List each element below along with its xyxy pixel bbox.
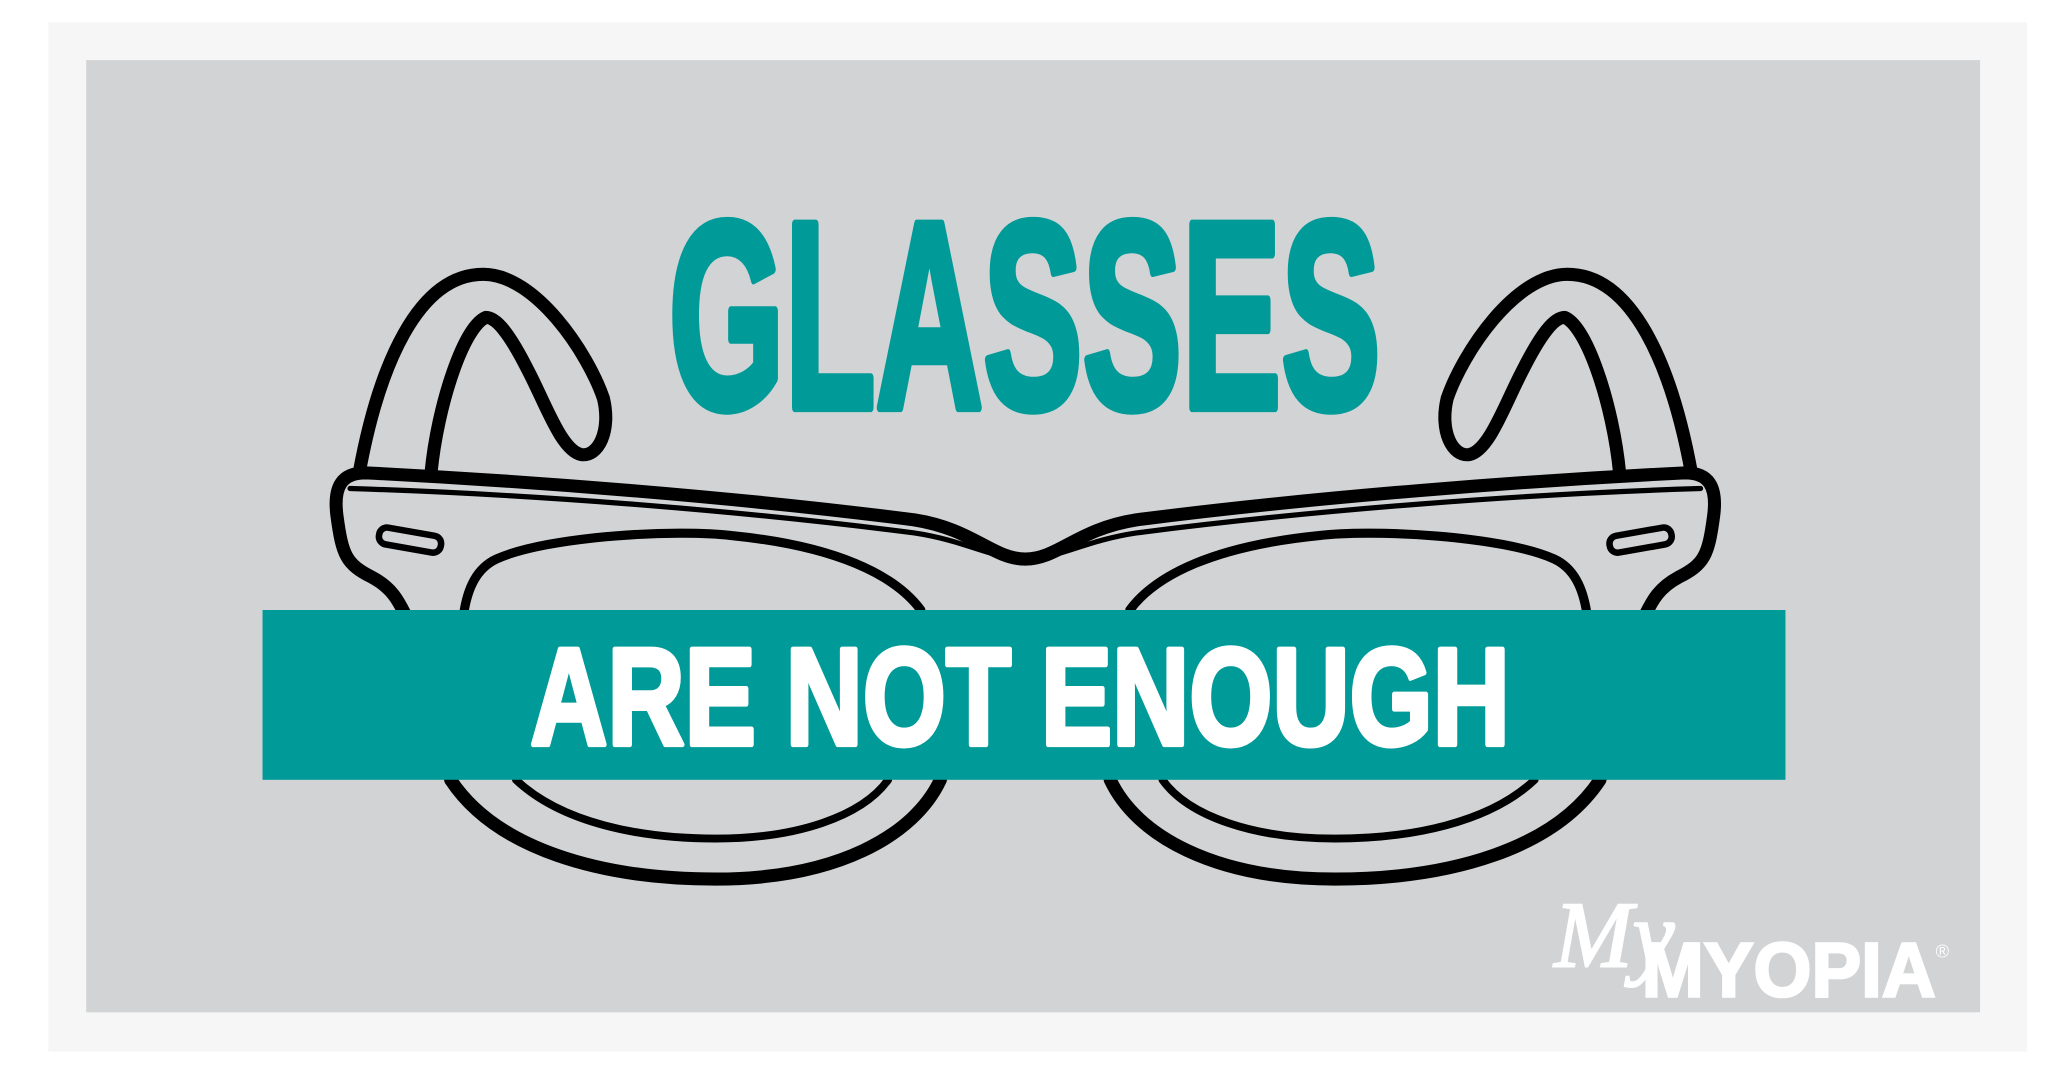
logo: MyMYOPIA: MYOPIA (1642, 928, 1936, 1014)
subtitle: ARE NOT ENOUGH: ARE NOT ENOUGH (530, 621, 1510, 775)
right half of glasses (1025, 274, 1715, 879)
left half of glasses (336, 274, 1025, 879)
logo: MyMYOPIA: My (1552, 884, 1675, 988)
logo: MyMYOPIA: ® (1936, 940, 1950, 961)
icon: glasses (336, 274, 1715, 879)
logo: MyMYOPIA (1552, 884, 1950, 1014)
banner band (263, 610, 1785, 780)
title: GLASSES: GLASSES (669, 168, 1381, 465)
